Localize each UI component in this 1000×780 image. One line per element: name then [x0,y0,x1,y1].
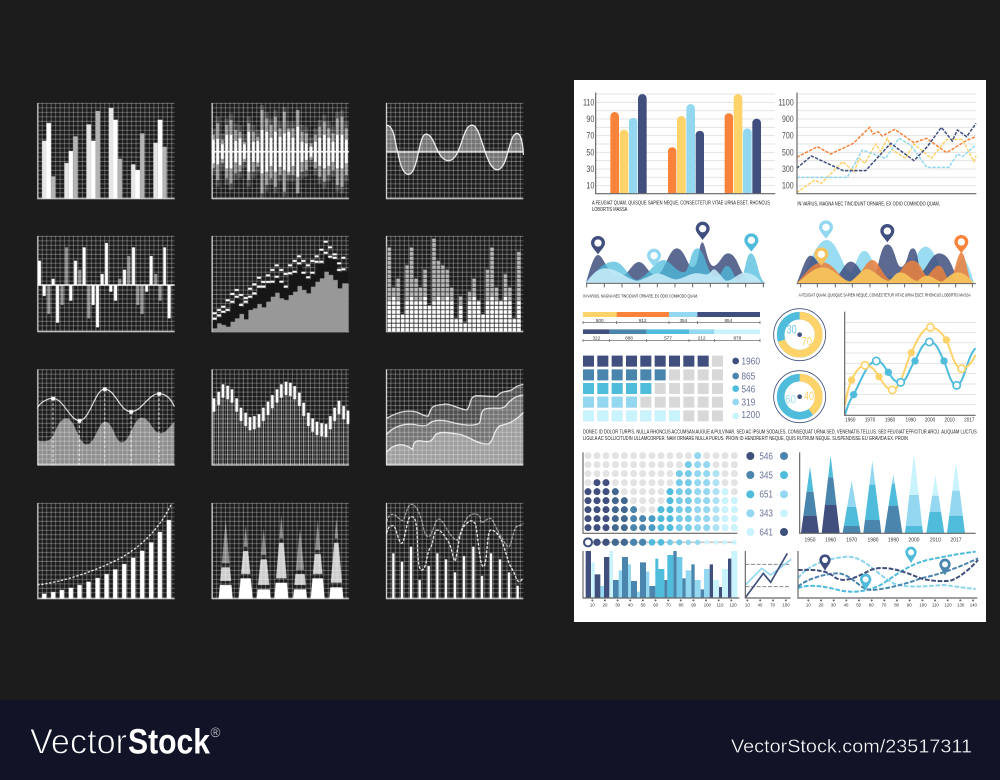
chart: dashed multi line: 1100 [778,98,794,108]
panel: white colour sheet [574,80,986,622]
chart: tiered blue triangles: 1980 [867,538,878,544]
chart: smooth lines with markers: 1960 [845,417,856,423]
chart: small trend lines: 10 [745,602,750,607]
chart: overlapping bars: 10 [590,602,595,607]
chart: dashed curves with pins: 70 [882,602,887,607]
chart: dashed curves with pins: 110 [932,602,939,607]
chart: layered area lines [386,369,523,465]
legend: paired dots: 343 [759,509,773,520]
chart: segmented bar two: 888 [625,336,633,341]
chart: overlapping bars: 20 [603,602,608,607]
chart: rounded colour bars: 30 [586,164,594,174]
legend: paired dots: 546 [759,451,773,462]
chart: rounded colour bars: 70 [586,131,594,141]
chart: segmented bar two: 878 [733,336,742,341]
chart: warm mountains with pins [797,220,976,287]
chart: dashed curves with pins: 20 [819,602,824,607]
chart: candlestick sine [212,369,349,465]
chart: dashed curves with pins: 10 [806,602,811,607]
chart: curve with markers over area [37,369,175,465]
chart axis: dot columns [583,452,737,533]
legend: waffle values: 546 [741,384,756,395]
chart: dashed curves with pins: 80 [894,602,900,607]
chart: smooth lines with markers [844,312,976,423]
footer banner [0,700,1000,780]
chart: dashed curves with pins: 60 [869,602,874,607]
brand logo light word: Vector [30,722,127,761]
chart: tiered blue triangles: 1960 [825,538,836,544]
chart: dashed curves with pins: 30 [831,602,836,607]
text block: body copy [583,430,977,442]
chart: smooth lines with markers: 1990 [905,417,916,423]
caption: blue mountains: IN VARIUS, MAGNA NEC TINCIDUNT ORNARE, EX ODIO COMMODO QUAM, [583,293,698,298]
chart: donut 60/40: 60 [785,392,796,406]
chart: donut 30/70: 70 [802,335,812,349]
chart: dashed multi line: 100 [782,181,794,191]
chart: dashed curves with pins: 50 [856,602,862,607]
chart: tiered blue triangles [800,452,976,544]
panel: monochrome charts row 1 and 2 [37,103,523,332]
chart: dashed curves with pins: 140 [970,602,978,607]
chart: single wave [386,103,523,199]
chart: dashed multi line [778,93,976,194]
legend: waffle values: 865 [741,372,756,383]
chart: overlapping bars: 50 [641,602,646,607]
chart: segmented bar one [583,312,760,324]
chart: overlapping bars: 60 [653,602,659,607]
chart: overlapping bars: 120 [729,602,737,607]
chart: overlapping bars [583,551,739,607]
chart: dot progress row [584,538,737,546]
legend: paired dots: 651 [759,490,773,501]
chart: overlapping bars: 110 [717,602,724,607]
chart: rounded colour bars: 50 [586,147,594,157]
caption: bar chart: A FEUGIAT QUAM, QUISQUE SAPIEN NEQUE, CONSECTETUR VITAE URNA EGET, RHONCUS [592,201,770,207]
chart: smooth lines with markers: 2010 [944,417,955,423]
chart: square waffle [583,361,724,416]
caption: bar chart: LOBORTIS MASSA [592,207,628,213]
chart: rounded colour bars [583,93,775,194]
chart: dot columns [588,456,734,528]
chart: dashed curves with pins [798,547,978,607]
chart: rounded colour bars: 10 [586,181,594,191]
chart: tiered blue triangles: 2010 [930,538,941,544]
chart: smooth lines with markers: 2017 [964,417,975,423]
chart: rounded colour bars: 110 [583,98,594,108]
chart: stacked squares [386,236,523,332]
caption: line chart: IN VARIUS, MAGNA NEC TINCIDUNT ORNARE, EX ODIO COMMODO QUAM, [797,201,940,207]
brand logo bold word: Stock [128,722,210,761]
chart: segmented bar one: 854 [724,318,733,323]
chart: smooth lines with markers: 1970 [865,417,875,423]
chart: donut 60/40 [774,371,826,423]
chart: donut 60/40: 40 [804,389,814,403]
chart: segmented bar one: 500 [596,318,604,323]
registered mark: ® [210,725,220,740]
chart: donut 30/70 [774,309,826,361]
chart: small trend lines: 70 [770,602,776,607]
image id text: VectorStock.com/23517311 [731,736,972,756]
chart: segmented bar two: 577 [664,336,672,341]
chart: blue mountains with pins [586,222,765,287]
chart: segmented bar two: 322 [592,336,601,341]
chart: segmented bar two: 212 [698,336,706,341]
legend: paired dots [746,451,788,538]
chart: dashed curves with pins: 120 [944,602,952,607]
chart: small trend lines: 100 [782,602,790,607]
chart: smooth lines with markers: 2000 [925,417,935,423]
chart: tiered blue triangles: 1990 [888,538,899,544]
chart: diverging bars [37,236,175,332]
chart: waveform bars [212,103,349,199]
chart: overlapping bars: 30 [615,602,621,607]
chart: small trend lines [745,551,791,607]
chart: tiered blue triangles: 2000 [908,538,919,544]
chart: overlapping bars: 40 [628,602,633,607]
chart: rounded colour bars: 90 [586,114,594,124]
chart: overlapping bars: 100 [704,602,712,607]
chart: segmented bar two [583,329,760,342]
legend: waffle values: 1960 [741,357,760,368]
chart: tiered blue triangles: 1950 [804,538,815,544]
chart: overlapping bars: 90 [691,602,697,607]
legend: paired dots: 345 [759,470,773,481]
chart: segmented bar one: 912 [639,318,647,323]
chart: grouped bars [37,103,175,199]
panel: colour charts bottom [583,451,978,607]
panel: colour charts top [583,93,976,298]
chart: tiered blue triangles: 2017 [950,538,961,544]
chart: segmented bar one: 354 [679,318,688,323]
chart: tiered triangles [212,503,349,599]
chart: stepped area with dashes [212,236,349,332]
legend: paired dots: 641 [759,527,773,538]
chart: donut 30/70: 30 [787,322,797,336]
chart: dashed multi line: 300 [782,164,794,174]
chart: thin bars with dashed curves [386,503,523,599]
chart: tiered blue triangles: 1970 [846,538,857,544]
chart: dashed multi line: 900 [782,114,794,124]
legend: waffle values [732,357,760,421]
caption: bar chart [592,201,770,213]
legend: waffle values: 1200 [741,410,760,421]
chart: overlapping bars: 80 [679,602,684,607]
chart: dashed curves with pins: 130 [957,602,965,607]
panel: colour charts middle [583,309,977,442]
chart: overlapping bars: 70 [666,602,671,607]
chart: dashed multi line: 700 [782,131,794,141]
chart: dashed curves with pins: 90 [907,602,912,607]
legend: waffle values: 319 [741,398,756,409]
chart: dashed curves with pins: 100 [919,602,927,607]
panel: monochrome charts row 3 and 4 [37,369,523,599]
chart: small trend lines: 40 [758,602,763,607]
chart: smooth lines with markers: 1980 [885,417,895,423]
chart: dashed curves with pins: 40 [844,602,849,607]
chart: dashed multi line: 500 [782,147,794,157]
chart: growth bars with dashed curve [37,503,175,599]
